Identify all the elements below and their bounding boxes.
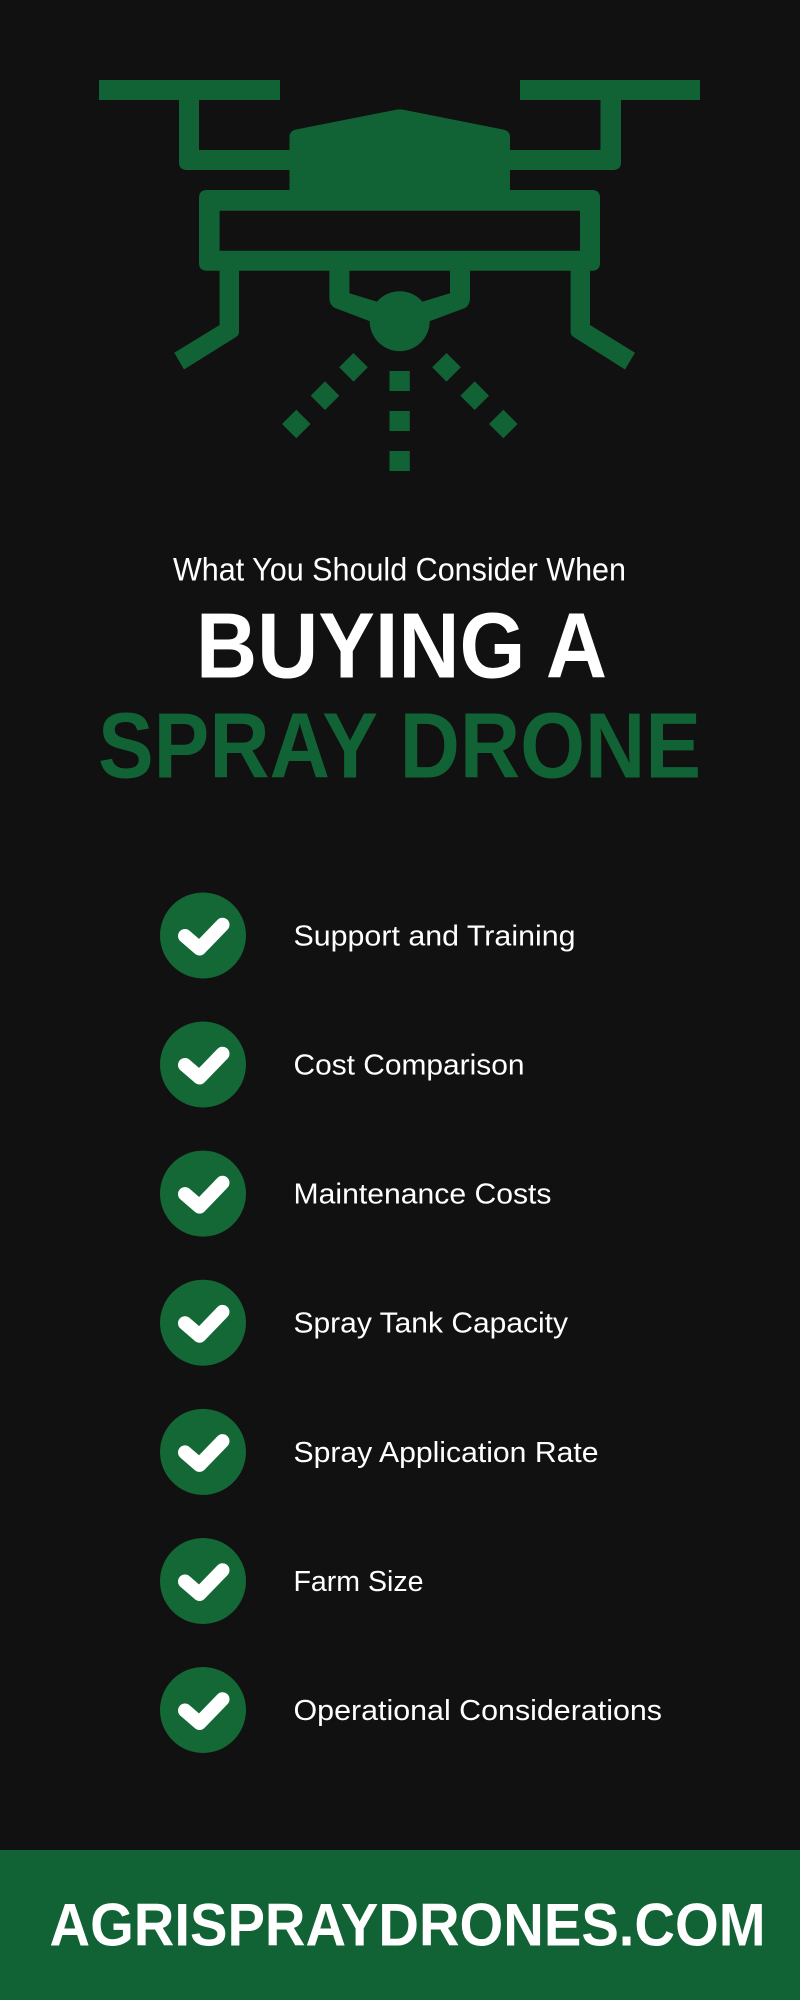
left landing leg — [174, 268, 239, 370]
item: farm size: Farm Size — [294, 1566, 424, 1598]
item: spray application rate — [160, 1409, 598, 1495]
website address: AGRISPRAYDRONES.COM — [50, 1892, 766, 1959]
title — [98, 552, 701, 797]
right spray drops — [432, 353, 518, 438]
item: spray tank capacity: Spray Tank Capacity — [294, 1308, 569, 1340]
item: maintenance costs: Maintenance Costs — [294, 1179, 552, 1211]
right landing leg — [571, 268, 635, 370]
right nozzle bracket — [422, 268, 470, 322]
title line: buying a: BUYING A — [196, 593, 607, 697]
item: operational considerations — [160, 1667, 662, 1753]
left nozzle bracket — [329, 268, 378, 322]
icon: spray drone — [99, 80, 700, 471]
item: cost comparison — [160, 1022, 524, 1108]
item: spray application rate: Spray Application Rate — [294, 1437, 598, 1469]
item: spray tank capacity — [160, 1280, 569, 1366]
item: cost comparison: Cost Comparison — [294, 1050, 524, 1082]
title intro line: What You Should Consider When — [173, 552, 626, 588]
spray nozzle — [370, 291, 430, 351]
item: support and training: Support and Training — [294, 920, 576, 952]
item: farm size — [160, 1538, 424, 1624]
left rotor — [99, 80, 290, 170]
footer banner — [0, 1850, 800, 2000]
right rotor — [510, 80, 700, 170]
left spray drops — [282, 353, 368, 438]
item: maintenance costs — [160, 1151, 552, 1237]
item: operational considerations: Operational Considerations — [294, 1695, 662, 1727]
title line: spray drone: SPRAY DRONE — [98, 693, 701, 797]
item: support and training — [160, 892, 576, 978]
checklist — [160, 892, 662, 1753]
center spray drops — [390, 371, 410, 471]
drone frame — [199, 190, 600, 271]
drone body — [290, 109, 510, 195]
